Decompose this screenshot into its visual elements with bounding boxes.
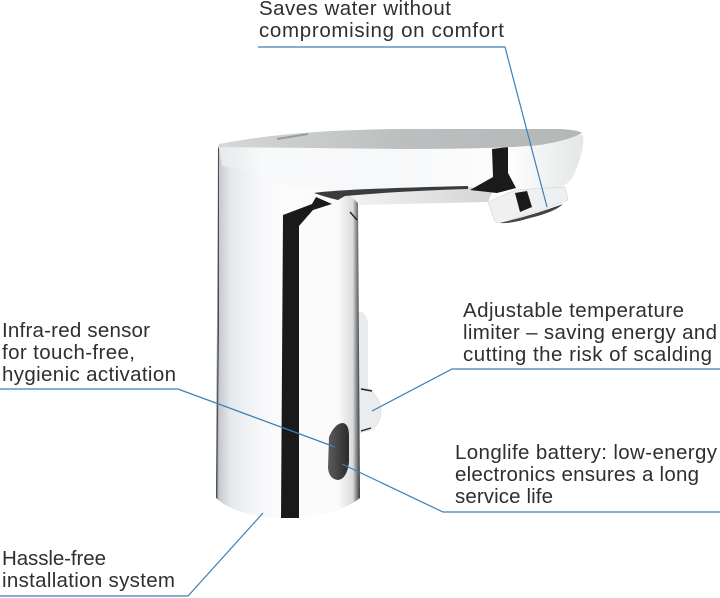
faucet illustration [216, 129, 590, 518]
temperature limiter knob [358, 388, 381, 433]
callout: installation system: Hassle-free [2, 547, 106, 570]
brand mark [277, 134, 308, 139]
callout: installation system: installation system [2, 569, 175, 592]
callout: longlife battery: service life [455, 485, 553, 508]
callout: longlife battery [342, 441, 720, 512]
aerator body [488, 187, 568, 223]
aerator black reflection [515, 191, 532, 212]
callout: infra-red sensor: Infra-red sensor [2, 319, 150, 342]
callout: temperature limiter: limiter – saving energy and [463, 321, 717, 344]
callout: temperature limiter [372, 299, 720, 411]
callout: longlife battery: electronics ensures a long [455, 463, 699, 486]
callout: temperature limiter: cutting the risk of scalding [463, 343, 712, 366]
callout: temperature limiter: Adjustable temperature [463, 299, 684, 322]
aerator outlet [500, 204, 563, 223]
callout: installation system [0, 513, 263, 596]
callout: saves water [258, 0, 547, 207]
spout black reflection [470, 147, 516, 193]
temperature limiter plate [358, 312, 368, 392]
callout: infra-red sensor: hygienic activation [2, 363, 176, 386]
spout underside [340, 186, 495, 205]
callout: longlife battery: Longlife battery: low-energy [455, 441, 718, 464]
infra-red sensor window [328, 423, 349, 480]
top plate [219, 129, 582, 149]
spout head [219, 135, 583, 192]
callout: infra-red sensor: for touch-free, [2, 341, 135, 364]
dark left edge [216, 148, 218, 498]
column top collar [299, 209, 358, 260]
callout: infra-red sensor [0, 319, 335, 447]
faucet body column [216, 146, 360, 518]
spout neck dark line [314, 186, 468, 200]
black reflection stripe [281, 197, 332, 518]
callout: saves water: compromising on comfort [259, 19, 504, 42]
